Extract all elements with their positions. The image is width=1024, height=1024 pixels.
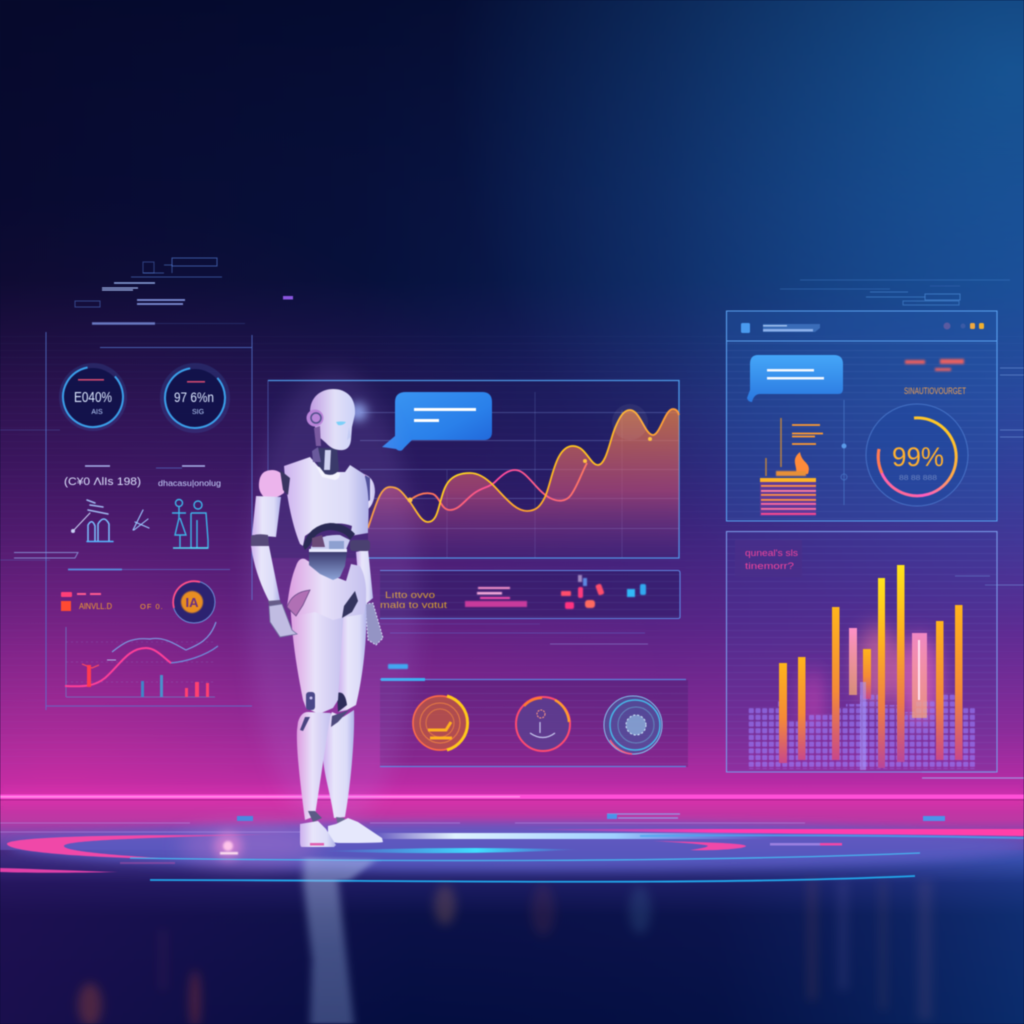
panel header: [741, 322, 984, 333]
gauge: right: 97 6%n: [174, 390, 214, 405]
waist joint: [350, 540, 370, 551]
hip joint: [287, 590, 310, 616]
legend row: OF 0.: [140, 602, 164, 611]
pink blocks icon: [561, 575, 605, 609]
legend row: AlNVLL.D: [79, 602, 112, 611]
white blue streak: [375, 833, 775, 839]
metric labels: dhacasu|onolug: [158, 478, 221, 488]
reflections on floor: [78, 858, 932, 1024]
cyan lower trail: [150, 876, 915, 882]
gauge: right: SIG: [192, 409, 204, 416]
decorative lines below strip: [380, 624, 648, 644]
near arm: [251, 470, 297, 637]
panel question label: tinemorr?: [745, 561, 794, 572]
line chart with bars: [65, 622, 218, 697]
strip text: malɑ to vɑtut: [380, 600, 447, 611]
far leg: [323, 600, 383, 843]
robot glow: [248, 370, 418, 830]
icon: stacked layers and flame: [760, 418, 823, 516]
icon: orange orb: [173, 581, 215, 623]
speech bubble: status: [747, 355, 843, 402]
floor: [0, 797, 1024, 1024]
blue ring trail: [130, 853, 920, 861]
pink trail right: [510, 829, 1024, 836]
gauge: left: E040%: [74, 390, 112, 406]
neck: [312, 447, 339, 475]
side bar and divider: [14, 552, 230, 570]
lens flare: [223, 841, 233, 851]
pink crescent left: [7, 834, 290, 859]
pink lower left trail: [0, 868, 118, 873]
gauge: left: AIS: [91, 409, 103, 416]
pink crescent right: [653, 841, 746, 850]
dial: orange: [412, 695, 468, 751]
panel question label: [735, 540, 802, 577]
head: [306, 389, 367, 450]
far arm: [356, 474, 383, 645]
far foot: [328, 818, 383, 843]
blurred pink bars: [465, 587, 527, 607]
strip text: [380, 590, 447, 611]
icon: two figures: [172, 500, 208, 548]
floor light trails: [0, 814, 1024, 882]
robot: [248, 370, 418, 847]
pelvis: [287, 552, 366, 620]
blurred red text and label: [904, 359, 966, 396]
robot reflection: [303, 858, 376, 1024]
panel: top right status: [726, 311, 997, 521]
area under curve: [368, 409, 679, 558]
metric labels: [64, 466, 221, 488]
metric labels: (C¥0 ΛlIs 198): [64, 476, 141, 488]
icon: orange orb: IA: [186, 595, 199, 610]
cyan ellipse trail: [320, 848, 581, 853]
near foot: [300, 821, 336, 847]
neon horizon line: [0, 788, 1024, 806]
yellow trend line: [368, 409, 679, 528]
chart grid: [360, 392, 679, 558]
gauge: 99 percent: 99%: [892, 442, 944, 472]
connector dots: [841, 400, 847, 505]
mid section: [303, 523, 355, 550]
strip text: Lıtto ovvo: [385, 590, 435, 601]
gauge: right: [153, 356, 237, 440]
panel: main line chart: [268, 380, 679, 560]
panel: three dial icons: [380, 664, 688, 767]
decorative data lines: top right: [780, 280, 1024, 778]
blurred red text and label: SINAUTIOVOURGET: [904, 386, 966, 396]
head glow: [349, 403, 367, 421]
panel: bottom right bar chart: [726, 531, 997, 772]
torso: [284, 457, 370, 552]
gauge: left: [52, 356, 134, 438]
panel: lower info strip: [380, 570, 680, 619]
speech bubble: chart: [382, 392, 492, 451]
legend row: [61, 592, 164, 611]
blue tag: [381, 664, 425, 681]
pink trend line: [410, 463, 587, 510]
dial: blue: [604, 696, 662, 754]
icon: machine and tools: [71, 500, 149, 542]
gauge: 99 percent: 88 88 888: [899, 475, 937, 482]
gauge: 99 percent: [866, 404, 968, 506]
dot matrix: [748, 694, 975, 769]
blue glow icon: [627, 584, 646, 597]
near leg: [290, 590, 345, 847]
background: [0, 0, 1024, 800]
bars: [779, 565, 962, 770]
chart highlights: [408, 404, 652, 502]
dial: red: [516, 697, 570, 751]
panel question label: quneal's sls: [745, 548, 798, 559]
bar glows: [807, 625, 940, 732]
panel: left metrics: [14, 332, 252, 710]
decorative data lines: top left: [0, 258, 960, 560]
